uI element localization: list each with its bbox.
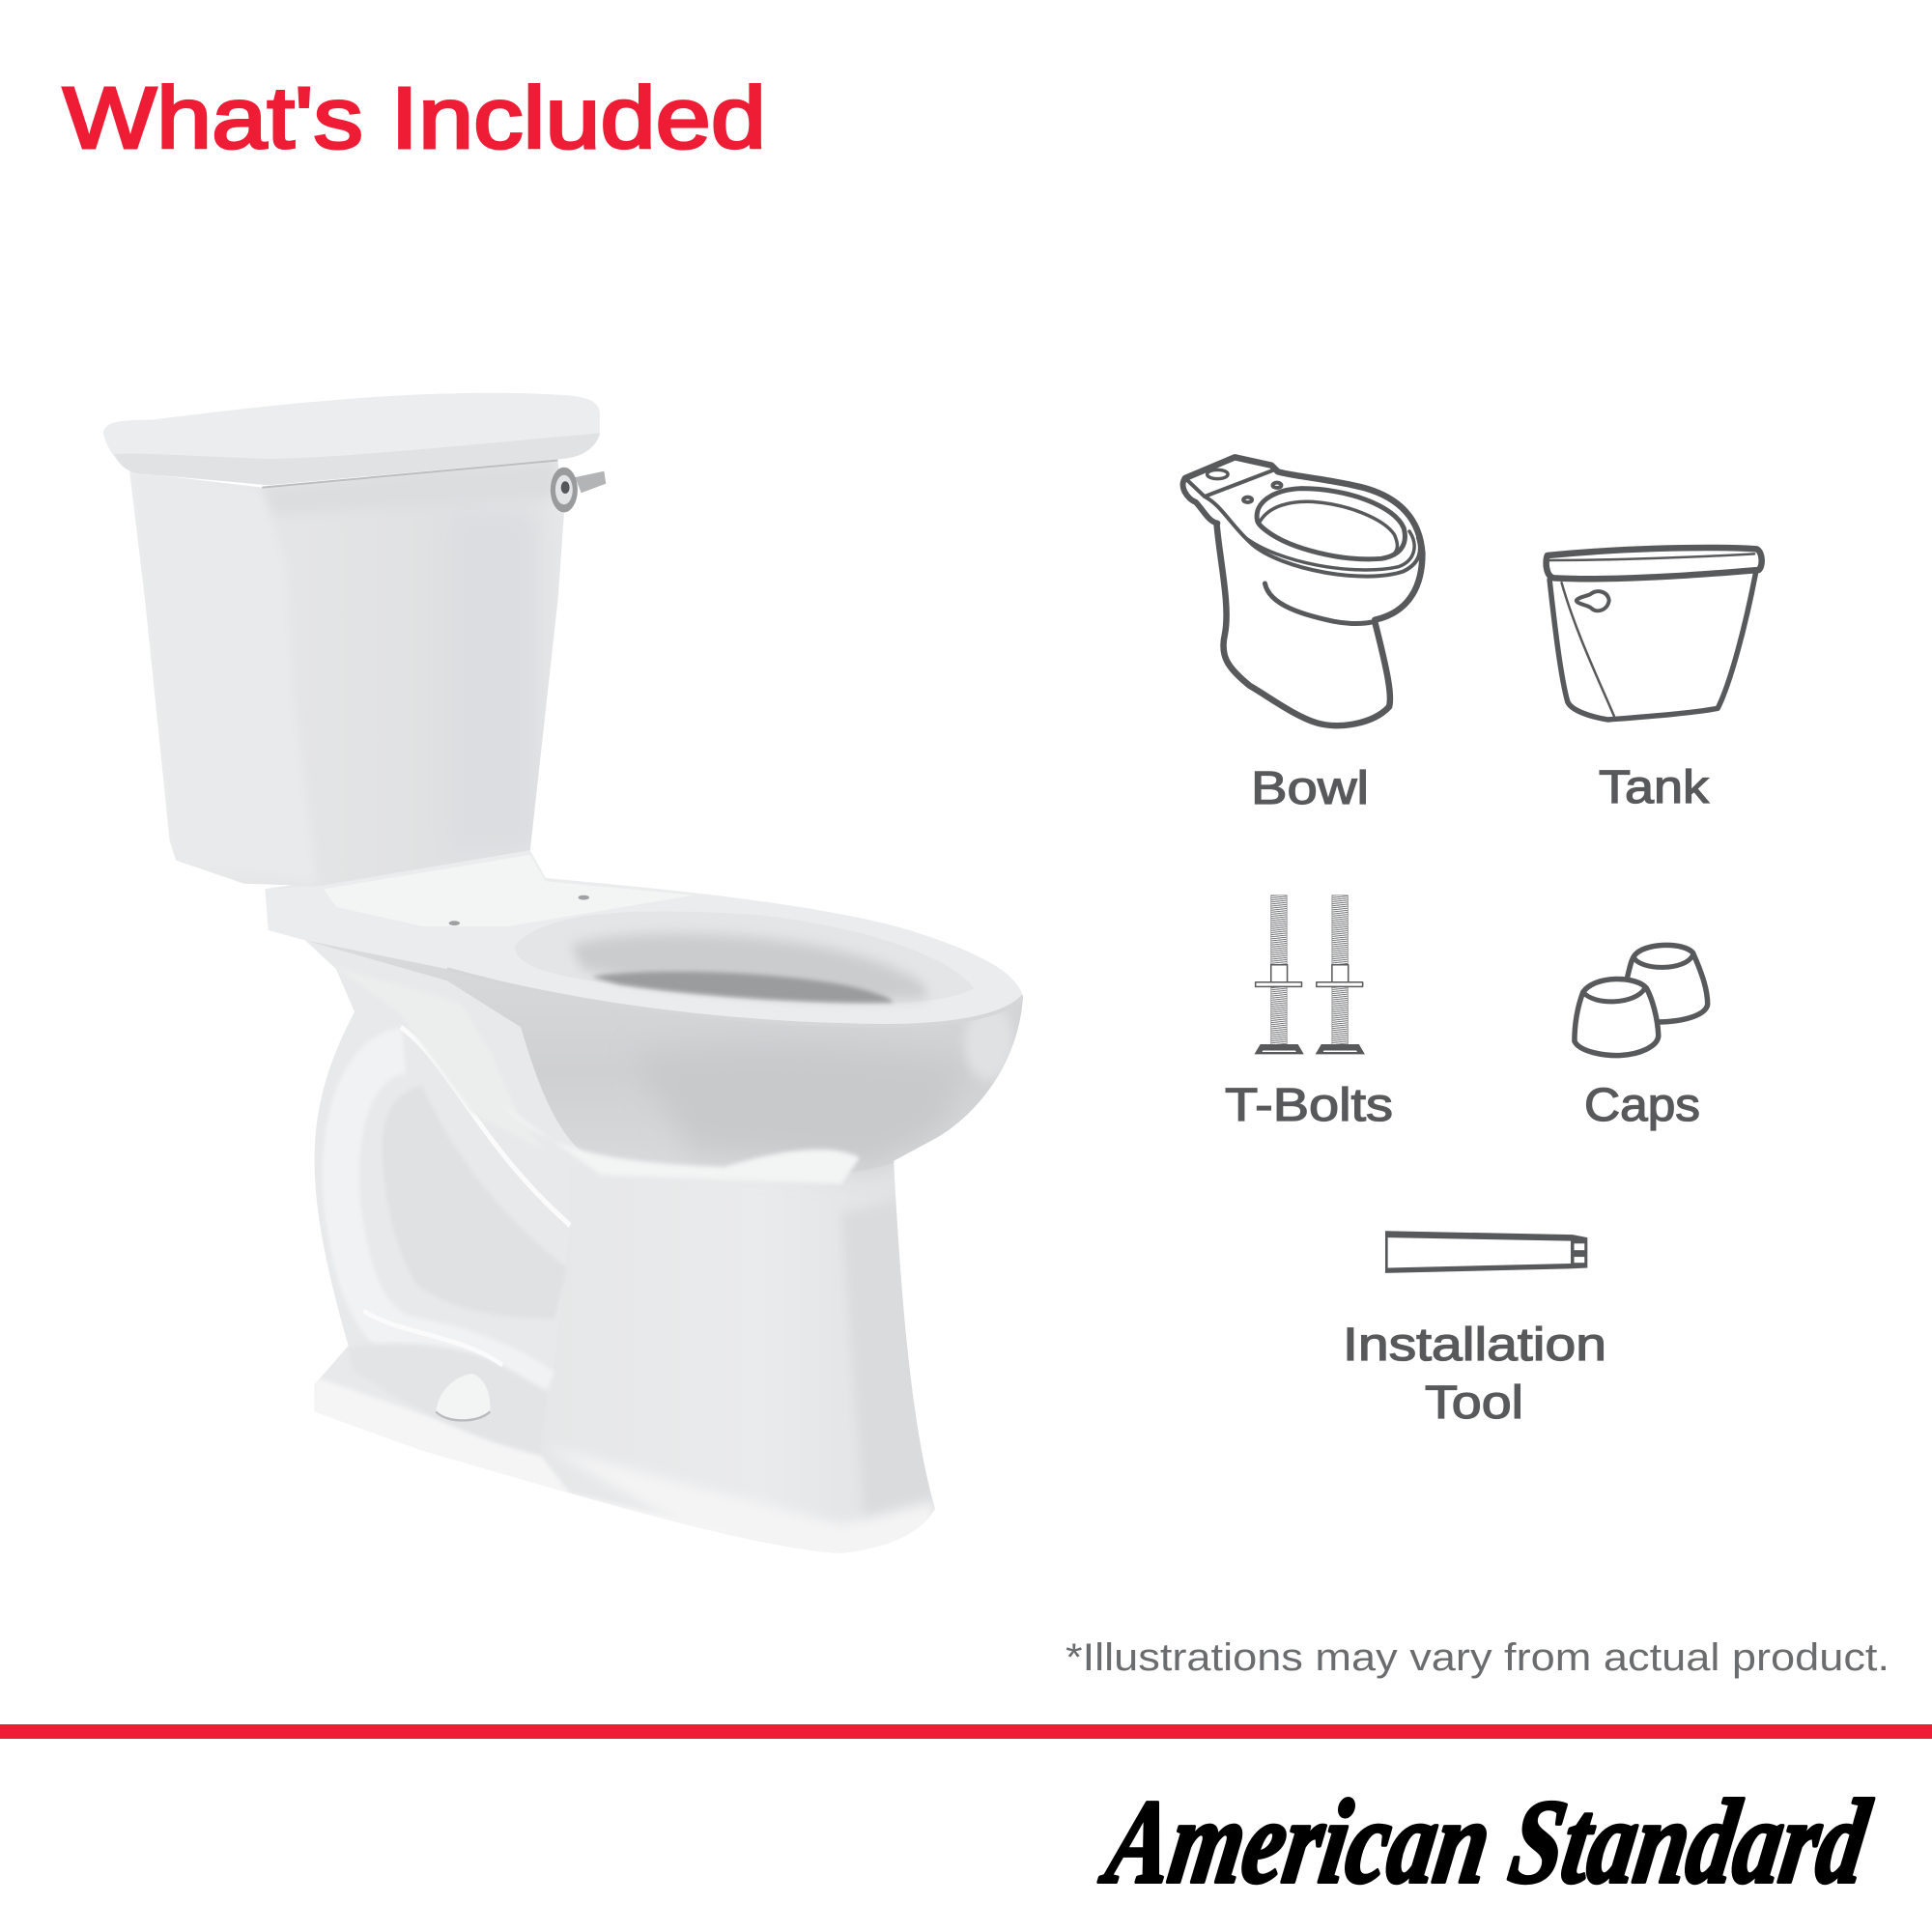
label: installation tool: Tool <box>1425 1378 1523 1429</box>
red divider <box>0 1724 1932 1739</box>
label: bowl: Bowl <box>1251 763 1369 814</box>
label: installation tool <box>1343 1320 1606 1429</box>
icon: caps <box>1575 945 1708 1056</box>
icon: installation tool <box>1385 1231 1587 1273</box>
toilet bowl <box>309 941 1023 1167</box>
bolt left <box>1255 895 1304 1054</box>
tank lid <box>103 393 600 488</box>
side panel ribbon <box>341 1051 546 1392</box>
icon: t-bolts <box>1255 895 1365 1054</box>
closet bolt cap <box>436 1374 490 1422</box>
product photo: two-piece toilet <box>103 393 1038 1571</box>
toilet lower body <box>256 833 1038 1571</box>
label: t-bolts: T-Bolts <box>1225 1080 1393 1131</box>
bolt right <box>1316 895 1365 1054</box>
toilet tank <box>129 460 564 886</box>
icon: tank <box>1547 548 1762 720</box>
footnote: *Illustrations may vary from actual product. <box>1065 1636 1889 1679</box>
bowl rim and deck <box>306 910 1022 1024</box>
label: installation tool: Installation <box>1343 1320 1606 1371</box>
label: tank: Tank <box>1599 762 1710 813</box>
title: What's Included <box>63 71 766 167</box>
label: caps: Caps <box>1584 1080 1700 1131</box>
flush lever <box>551 468 606 512</box>
icon: bowl <box>1183 457 1422 725</box>
